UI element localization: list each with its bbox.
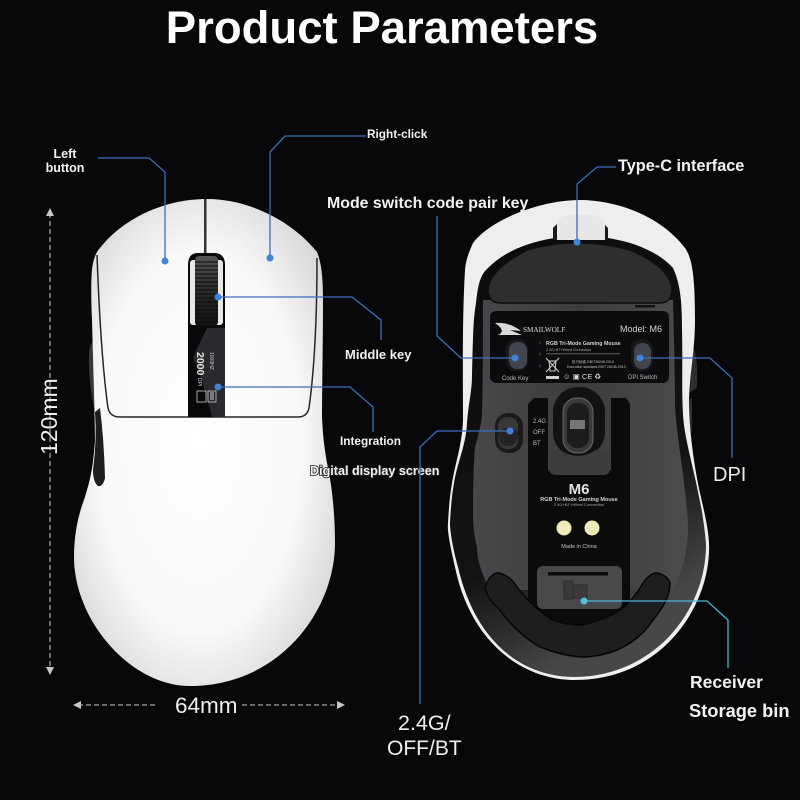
label plate: SMAILWOLF xyxy=(523,326,565,334)
mode switch: 2.4G xyxy=(533,419,546,425)
dpi switch button xyxy=(631,339,653,371)
callout: left button xyxy=(46,147,168,264)
callout: dpi xyxy=(636,354,746,486)
callout: left button: button xyxy=(46,161,84,175)
callout: mode switch code pair key xyxy=(327,195,529,362)
label plate: Model: M6 xyxy=(620,324,662,334)
mode switch: OFF xyxy=(533,430,545,436)
centre black spine xyxy=(528,398,630,630)
mouse: top view xyxy=(74,199,335,686)
product text xyxy=(540,481,618,550)
callout: type-c interface: Type-C interface xyxy=(618,157,744,175)
label plate: Execution standard:GB/T 26245-2010 xyxy=(567,365,626,369)
callout: middle key xyxy=(214,294,412,362)
label plate: Code Key xyxy=(502,376,528,382)
dimension: height 120mm xyxy=(36,208,62,675)
callout: type-c interface xyxy=(574,157,744,246)
white shell xyxy=(448,200,709,680)
callout: receiver storage bin: Storage bin xyxy=(689,700,790,721)
callout: integration digital display screen: Digital display screen xyxy=(310,464,440,478)
callout: right-click: Right-click xyxy=(367,127,428,141)
callout: middle key: Middle key xyxy=(345,347,412,362)
digital display xyxy=(193,328,225,417)
callout: receiver storage bin xyxy=(580,598,790,721)
grey inner plate xyxy=(473,300,688,590)
callout: receiver storage bin: Receiver xyxy=(690,672,763,692)
logo xyxy=(495,323,522,335)
callout: left button: Left xyxy=(54,147,77,161)
upper side button xyxy=(89,343,98,408)
lower side button xyxy=(93,408,105,486)
bottom glide pad xyxy=(485,573,670,657)
product text: M6 xyxy=(569,481,589,498)
callout: 2.4g off bt: OFF/BT xyxy=(387,737,462,760)
callout: dpi: DPI xyxy=(713,464,746,486)
product text: Made in China xyxy=(561,544,598,550)
body shell xyxy=(74,199,335,686)
callout: integration digital display screen xyxy=(214,384,440,478)
title: Product Parameters xyxy=(166,2,598,53)
callout: integration digital display screen: Integration xyxy=(340,434,401,448)
digital display: DPI xyxy=(196,378,202,386)
receiver storage bin xyxy=(537,566,622,609)
product text: 2.4G+BT+Wired Connection xyxy=(554,502,604,507)
top glide pad xyxy=(488,243,672,303)
black base xyxy=(450,236,706,677)
digital display: 2000 xyxy=(194,352,206,376)
callout: 2.4g off bt xyxy=(387,428,514,760)
dimension: width 64mm: 64mm xyxy=(175,693,238,718)
dimension: height 120mm: 120mm xyxy=(36,378,62,455)
grey panel under sensor xyxy=(549,450,610,475)
product text: RGB Tri-Mode Gaming Mouse xyxy=(540,497,618,503)
mode switch xyxy=(495,413,546,453)
callout: mode switch code pair key: Mode switch code pair key xyxy=(327,195,529,212)
label plate: ☺ ▣ CE ♻ xyxy=(563,372,601,381)
label plate: 2.4G+BT+Wired Connection xyxy=(546,348,591,352)
callout: 2.4g off bt: 2.4G/ xyxy=(398,711,451,735)
mouse: bottom view xyxy=(448,200,709,680)
button seam xyxy=(97,255,317,417)
scroll and display strip xyxy=(188,253,225,417)
dimension: width 64mm xyxy=(73,693,345,718)
digital display: 1000HZ xyxy=(208,352,214,370)
type-c port xyxy=(553,215,608,240)
label plate xyxy=(490,311,669,383)
callout: right-click xyxy=(266,127,428,262)
label plate: DPI Switch xyxy=(628,375,657,381)
label plate: 执行标准 GB/T26245-2010 xyxy=(572,359,614,364)
pad notch xyxy=(635,305,655,308)
side buttons xyxy=(688,345,697,432)
label plate: RGB Tri-Mode Gaming Mouse xyxy=(546,341,621,347)
compliance icons xyxy=(546,358,559,372)
centre split xyxy=(204,199,206,253)
code key button xyxy=(506,339,528,371)
scroll wheel xyxy=(190,256,223,326)
charging contacts xyxy=(556,520,600,536)
mode switch: BT xyxy=(533,441,541,447)
sensor xyxy=(553,387,605,457)
